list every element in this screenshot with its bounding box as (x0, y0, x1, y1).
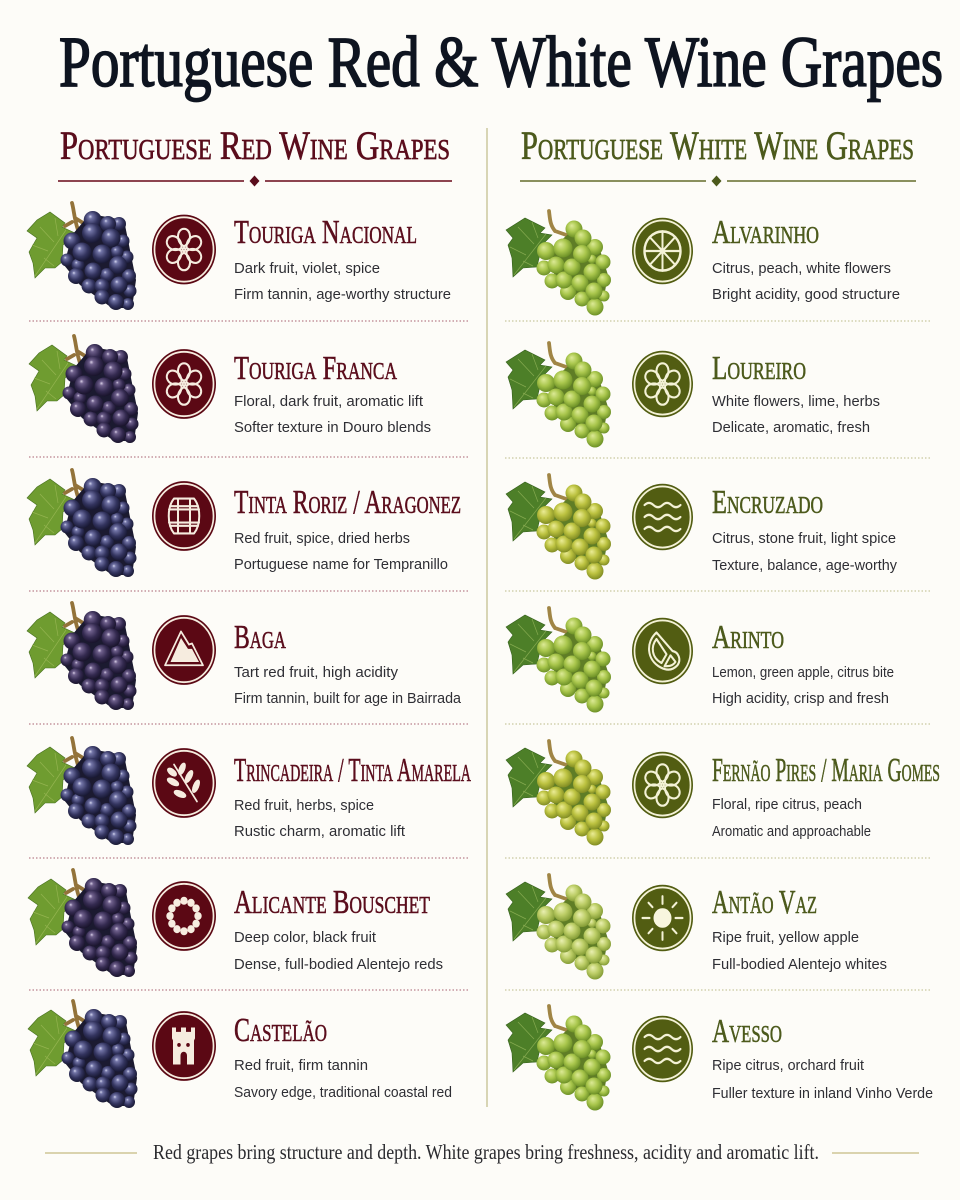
tasting notes: Portuguese name for Tempranillo (234, 557, 448, 573)
grape name: Touriga Franca (234, 350, 397, 387)
row: Avesso (506, 1006, 933, 1110)
grape cluster (27, 738, 136, 845)
panel: white wine grapes (505, 123, 940, 1110)
grape name: Avesso (712, 1013, 782, 1050)
row: Fernão Pires / Maria Gomes (506, 741, 940, 846)
tasting notes: Full-bodied Alentejo whites (712, 957, 887, 973)
icon: flower (152, 215, 216, 284)
icon: flower (632, 752, 693, 818)
tasting notes: Aromatic and approachable (712, 824, 871, 840)
grape cluster (28, 870, 138, 977)
tasting notes (234, 531, 448, 573)
grape cluster (506, 475, 611, 580)
tasting notes: Fuller texture in inland Vinho Verde (712, 1086, 933, 1102)
grape name: Antão Vaz (712, 884, 817, 921)
tasting notes (712, 261, 900, 303)
icon: citrus wheel (632, 218, 693, 284)
icon: mountain (152, 615, 216, 685)
grape name: Tinta Roriz / Aragonez (234, 484, 461, 521)
row: Tinta Roriz / Aragonez (27, 470, 461, 577)
row: Arinto (506, 608, 894, 712)
icon: sun (632, 885, 693, 951)
row: Castelão (28, 1001, 452, 1108)
grape cluster (506, 741, 611, 846)
row: Touriga Franca (29, 336, 431, 443)
grape cluster (27, 470, 136, 577)
heading rule: red (58, 176, 452, 186)
icon: waves (632, 1016, 693, 1082)
tasting notes: Red fruit, firm tannin (234, 1058, 368, 1074)
tasting notes: Ripe fruit, yellow apple (712, 930, 859, 946)
icon: herb sprig (152, 748, 216, 818)
grape name: Alicante Bouschet (234, 884, 430, 921)
row: Trincadeira / Tinta Amarela (27, 738, 471, 845)
tasting notes: Floral, ripe citrus, peach (712, 797, 862, 813)
tasting notes: Delicate, aromatic, fresh (712, 420, 870, 436)
tasting notes: Softer texture in Douro blends (234, 420, 431, 436)
row: Baga (27, 603, 462, 710)
icon: citrus wedge (632, 618, 693, 684)
tasting notes (234, 394, 431, 436)
tasting notes: Tart red fruit, high acidity (234, 665, 399, 681)
tasting notes (712, 665, 894, 707)
grape cluster (27, 603, 136, 710)
tasting notes: Rustic charm, aromatic lift (234, 824, 405, 840)
row: Alicante Bouschet (28, 870, 443, 977)
tasting notes: Red fruit, herbs, spice (234, 798, 374, 814)
tasting notes: Texture, balance, age-worthy (712, 558, 898, 574)
grape cluster (506, 1006, 611, 1110)
tasting notes: Firm tannin, age-worthy structure (234, 287, 451, 303)
icon: flower (632, 351, 693, 417)
tasting notes (234, 1058, 452, 1101)
grape name: Castelão (234, 1012, 327, 1049)
row: Loureiro (506, 343, 880, 448)
grape cluster (27, 203, 136, 310)
grape cluster (506, 875, 611, 980)
tasting notes: Deep color, black fruit (234, 930, 376, 946)
tasting notes: High acidity, crisp and fresh (712, 691, 889, 707)
grape cluster (28, 1001, 138, 1108)
icon: waves (632, 484, 693, 550)
tasting notes (712, 1058, 933, 1102)
tasting notes: Savory edge, traditional coastal red (234, 1085, 452, 1101)
heading rule: white (520, 176, 916, 186)
row: Alvarinho (506, 211, 900, 316)
row: Antão Vaz (506, 875, 887, 980)
tasting notes (712, 394, 880, 436)
tasting notes: White flowers, lime, herbs (712, 394, 880, 410)
tasting notes (234, 798, 405, 840)
row: Encruzado (506, 475, 898, 580)
tasting notes: Floral, dark fruit, aromatic lift (234, 394, 423, 410)
grape name: Baga (234, 619, 286, 656)
icon: barrel (152, 481, 216, 551)
grape cluster (506, 608, 611, 712)
grape name: Loureiro (712, 350, 806, 387)
tasting notes: Lemon, green apple, citrus bite (712, 665, 894, 681)
footer note: Red grapes bring structure and depth. White grapes bring freshness, acidity and aromatic lift. (153, 1140, 819, 1164)
grape cluster (29, 336, 138, 443)
grape name: Arinto (712, 619, 784, 656)
tasting notes: Bright acidity, good structure (712, 287, 900, 303)
panel: red wine grapes (27, 123, 471, 1108)
tasting notes (234, 261, 451, 303)
tasting notes: Citrus, stone fruit, light spice (712, 531, 896, 547)
icon: flower (152, 349, 216, 419)
row: Touriga Nacional (27, 203, 451, 310)
center divider (486, 128, 488, 1107)
tasting notes (234, 930, 443, 973)
grape cluster (506, 343, 611, 448)
grape name: Alvarinho (712, 214, 819, 251)
grape cluster (506, 211, 611, 316)
grape name: Touriga Nacional (234, 214, 417, 251)
tasting notes (712, 531, 898, 574)
grape name: Trincadeira / Tinta Amarela (234, 752, 471, 789)
tasting notes (234, 665, 462, 707)
icon: castle tower (152, 1011, 216, 1081)
grape name: Encruzado (712, 484, 823, 521)
icon: ring of berries (152, 881, 216, 951)
tasting notes (712, 930, 887, 973)
tasting notes: Red fruit, spice, dried herbs (234, 531, 410, 547)
heading: red: Portuguese Red Wine Grapes (60, 123, 450, 168)
tasting notes (712, 797, 871, 840)
tasting notes: Dense, full-bodied Alentejo reds (234, 957, 443, 973)
tasting notes: Ripe citrus, orchard fruit (712, 1058, 864, 1074)
tasting notes: Firm tannin, built for age in Bairrada (234, 691, 462, 707)
tasting notes: Citrus, peach, white flowers (712, 261, 891, 277)
tasting notes: Dark fruit, violet, spice (234, 261, 380, 277)
